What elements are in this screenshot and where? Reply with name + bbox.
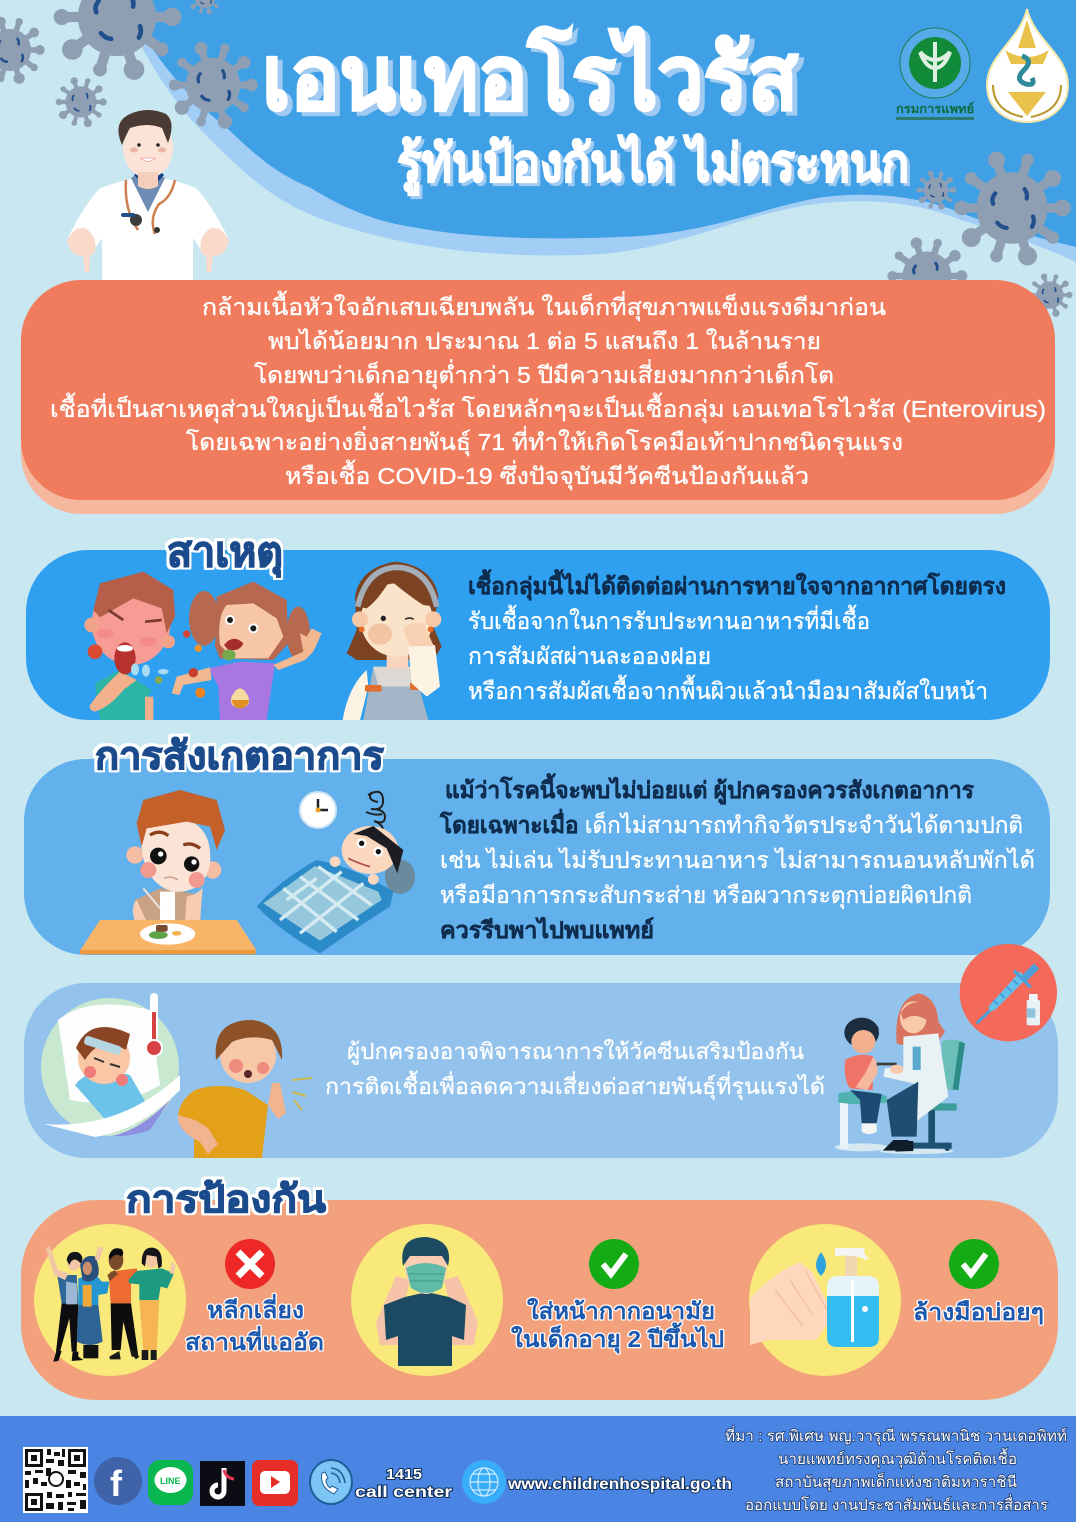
intro paragraph: พบได้น้อยมาก ประมาณ 1 ต่อ 5 แสนถึง 1 ในล้านราย [268,328,821,354]
intro paragraph: เชื้อที่เป็นสาเหตุส่วนใหญ่เป็นเชื้อไวรัส โดยหลักๆจะเป็นเชื้อกลุ่ม เอนเทอโรไวรัส (Enterovirus) [50,393,1046,423]
icon: facebook: f [110,1463,123,1504]
panel: intro shadow [21,300,1055,514]
panel: vaccine [24,983,1058,1158]
icon: youtube [252,1460,298,1506]
icon: globe [462,1460,506,1504]
source credits: นายแพทย์ทรงคุณวุฒิด้านโรคติดเชื้อ [778,1448,1017,1469]
symptoms text: เช่น ไม่เล่น ไม่รับประทานอาหาร ไม่สามารถนอนหลับพักได้ [440,847,1035,873]
icon: woman touching face [343,562,442,720]
avoid crowded places text: สถานที่แออัด [185,1325,324,1355]
icon: facebook [94,1457,142,1505]
wear a mask text: ในเด็กอายุ 2 ปีขึ้นไป [511,1322,724,1354]
vaccine text [325,1039,825,1100]
source credits: สถาบันสุขภาพเด็กแห่งชาติมหาราชินี [775,1472,1017,1492]
logo: department of medical services: กรมการแพทย์ [896,102,974,116]
source credits: ที่มา : รศ.พิเศษ พญ.วารุณี พรรณพานิช วานเดอพิทท์ [725,1425,1067,1446]
symptoms text: แม้ว่าโรคนี้จะพบไม่บ่อยแต่ ผู้ปกครองควรสังเกตอาการ [445,773,975,805]
causes text: รับเชื้อจากในการรับประทานอาหารที่มีเชื้อ [468,605,870,634]
icon: child in bed [257,826,415,953]
avoid crowded places text: หลีกเลี่ยง [207,1293,304,1323]
vaccine text: ผู้ปกครองอาจพิจารณาการให้วัคซีนเสริมป้องกัน [347,1039,804,1065]
heading: symptoms: การสังเกตอาการ [95,735,384,778]
avoid crowded places text [185,1293,324,1355]
heading: prevention: การป้องกัน [126,1179,326,1221]
header blue wave [125,0,1076,247]
source credits: ออกแบบโดย งานประชาสัมพันธ์และการสื่อสาร [745,1494,1048,1514]
panel: causes [26,550,1050,720]
title: เอนเทอโรไวรัส [262,26,798,129]
icon: clock [300,792,336,828]
heading: causes: สาเหตุ [167,529,283,578]
icon: line: LINE [160,1476,181,1486]
icon: coughing boy [84,572,175,720]
icon: green check hand [949,1239,999,1289]
call center: call center [355,1484,452,1501]
panel: symptoms [24,759,1050,955]
call center: 1415 [386,1466,422,1483]
panel: intro [21,280,1055,500]
wear a mask text: ใส่หน้ากากอนามัย [527,1297,715,1324]
intro paragraph [50,291,1046,490]
wash hands text: ล้างมือบ่อยๆ [913,1299,1044,1325]
symptoms text: ควรรีบพาไปพบแพทย์ [440,916,654,943]
causes text: เชื้อกลุ่มนี้ไม่ได้ติดต่อผ่านการหายใจจากอากาศโดยตรง [468,569,1006,601]
symptoms text: โดยเฉพาะเมื่อ เด็กไม่สามารถทำกิจวัตรประจำวันได้ตามปกติ [439,808,1023,838]
call center [355,1466,452,1501]
logo: hospital droplet [987,9,1068,122]
intro paragraph: โดยเฉพาะอย่างยิ่งสายพันธุ์ 71 ที่ทำให้เกิดโรคมือเท้าปากชนิดรุนแรง [186,426,903,456]
icon: masked boy [351,1224,503,1376]
logo: department of medical services [896,28,974,120]
icon: tiktok [200,1461,245,1506]
icon: coughing boy with stomach ache [178,1020,312,1158]
icon: child receiving vaccine [835,993,965,1154]
icon: phone [310,1460,352,1504]
intro paragraph: หรือเชื้อ COVID-19 ซึ่งปัจจุบันมีวัคซีนป้องกันแล้ว [285,460,809,490]
icon: scribble [366,792,385,836]
intro paragraph: กล้ามเนื้อหัวใจอักเสบเฉียบพลัน ในเด็กที่สุขภาพแข็งแรงดีมาก่อน [202,291,886,321]
header light wave [120,0,1076,262]
viruses top right [887,152,1072,317]
icon: crowd of people [34,1224,186,1376]
icon: boy not eating [80,790,257,954]
website: www.childrenhospital.go.th [507,1476,732,1493]
causes text: หรือการสัมผัสเชื้อจากพื้นผิวแล้วนำมือมาสัมผัสใบหน้า [468,675,988,704]
symptoms text [439,773,1035,943]
qr code [23,1447,88,1513]
causes text: การสัมผัสผ่านละอองฝอย [468,643,711,669]
icon: line [148,1460,193,1505]
causes text [468,569,1006,704]
intro paragraph: โดยพบว่าเด็กอายุต่ำกว่า 5 ปีมีความเสี่ยงมากกว่าเด็กโต [254,359,834,389]
wear a mask text [511,1297,724,1354]
symptoms text: หรือมีอาการกระสับกระส่าย หรือผวากระตุกบ่อยผิดปกติ [440,882,972,909]
vaccine text: การติดเชื้อเพื่อลดความเสี่ยงต่อสายพันธุ์ที่รุนแรงได้ [325,1071,825,1100]
icon: sick girl [172,582,322,720]
icon: hand washing with sanitizer [749,1224,901,1376]
icon: red syringe circle [960,944,1057,1041]
icon: sick child in bed [41,993,180,1137]
icon: green check mask [589,1239,639,1289]
icon: red cross [225,1239,275,1289]
source credits [725,1425,1067,1514]
doctor illustration [67,110,229,280]
subtitle: รู้ทันป้องกันได้ ไม่ตระหนก [397,133,909,196]
viruses top left [0,0,258,129]
panel: prevention [21,1200,1058,1400]
footer [0,1416,1076,1522]
